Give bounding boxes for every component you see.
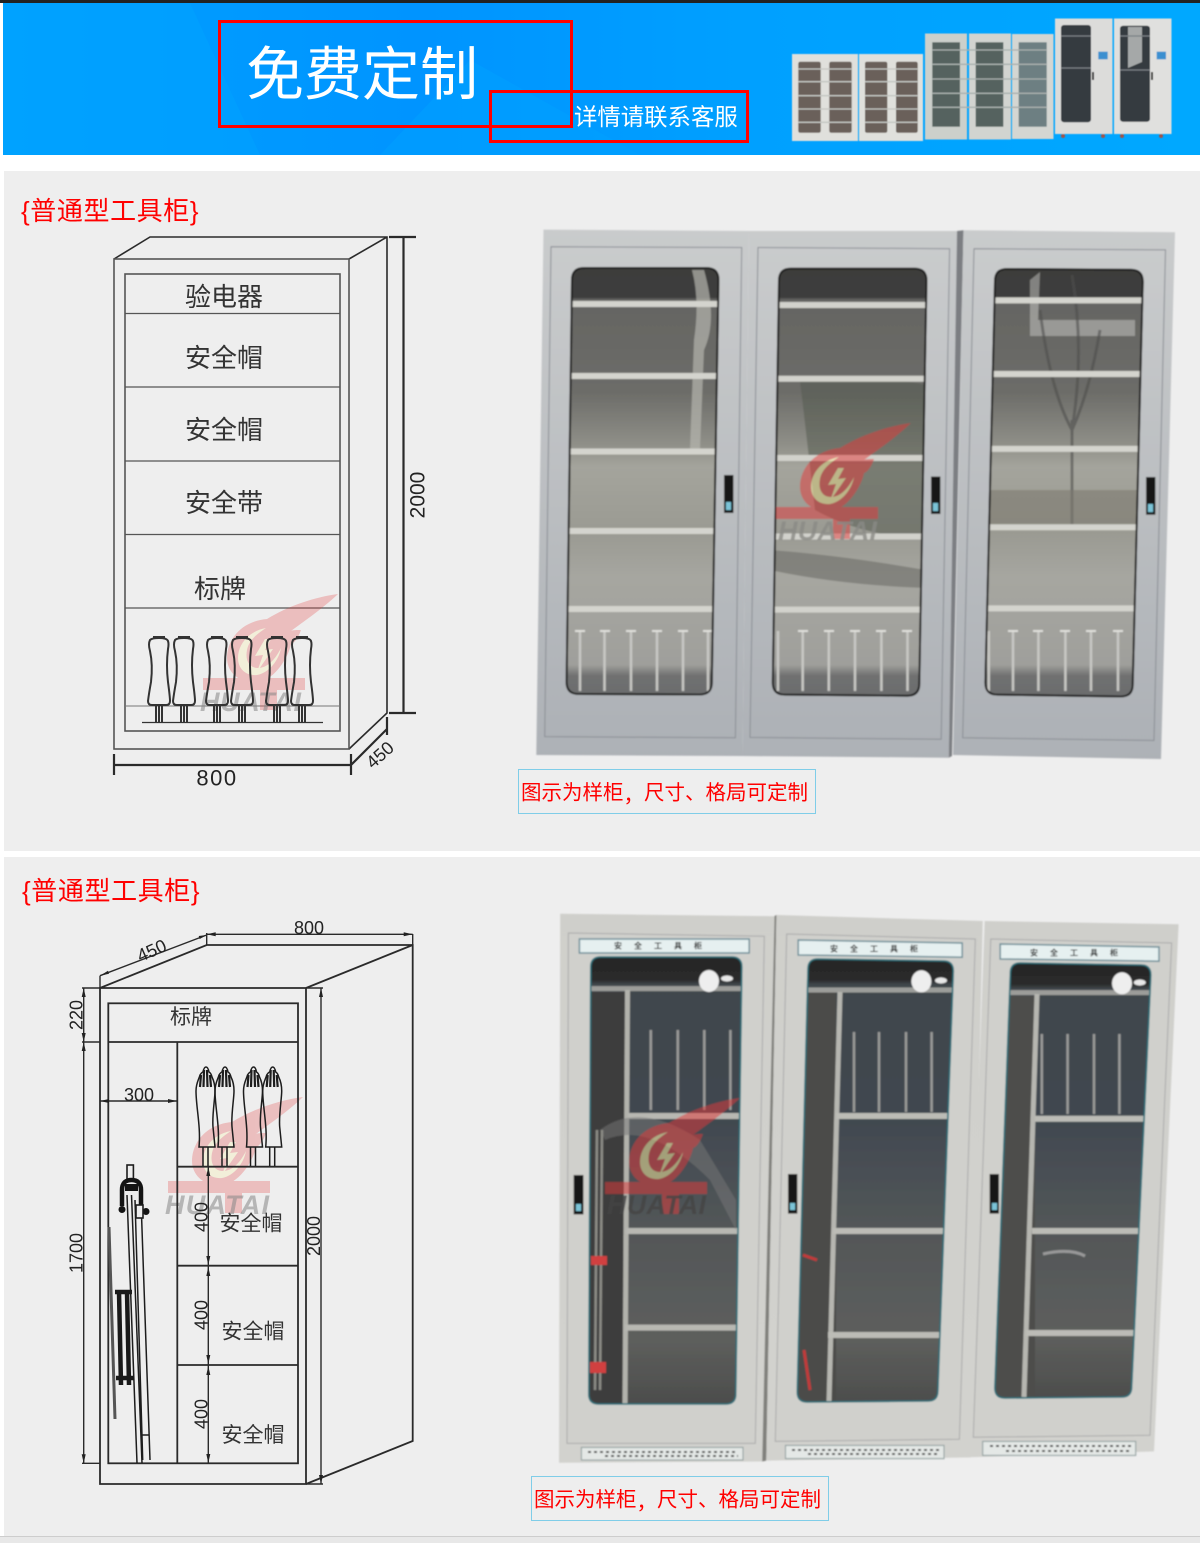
dimension lines	[82, 932, 413, 1484]
compartment labels: 标牌	[194, 574, 246, 604]
cabinet 2	[742, 231, 957, 758]
heading: {普通型工具柜}	[21, 196, 199, 226]
name plate	[1000, 944, 1159, 961]
compartment labels	[170, 1006, 284, 1447]
caption box: 图示为样柜，尺寸、格局可定制	[521, 778, 808, 808]
banner	[0, 0, 1200, 155]
watermark text: HUATAI	[200, 687, 302, 717]
dimension labels	[66, 918, 324, 1429]
cabinet 3	[949, 230, 1175, 759]
banner subtitle: 详情请联系客服	[574, 104, 738, 130]
compartment labels: 标牌	[170, 1006, 212, 1029]
dimension lines	[114, 237, 416, 775]
compartment labels: 安全帽	[222, 1424, 284, 1447]
watermark text: HUATAI	[778, 516, 878, 546]
dimension labels: 1700	[66, 1233, 86, 1273]
watermark text: HUATAI	[607, 1190, 707, 1220]
compartment labels: 安全带	[185, 488, 263, 518]
interior frame	[108, 1003, 298, 1463]
dimension labels: 400	[192, 1300, 212, 1330]
compartment labels: 安全帽	[220, 1212, 282, 1236]
dimension labels: 800	[294, 918, 324, 938]
cabinet 2	[762, 915, 983, 1462]
dimension labels: 300	[124, 1085, 154, 1105]
name plate	[579, 939, 749, 953]
compartment labels: 安全帽	[222, 1320, 284, 1344]
banner title: 免费定制	[246, 42, 478, 108]
insulated boots	[142, 638, 323, 722]
dimension labels	[196, 472, 430, 790]
insulating hook stick and grounding wire	[109, 1165, 150, 1463]
watermark logo	[605, 1098, 740, 1214]
cabinet 3	[966, 921, 1179, 1457]
dimension labels: 400	[192, 1202, 212, 1232]
red box: subtitle	[490, 92, 748, 142]
compartment labels: 安全帽	[185, 415, 263, 445]
panel: cabinet type 1	[4, 171, 1200, 851]
cabinet 1	[536, 230, 749, 756]
panel: cabinet type 2	[4, 857, 1200, 1536]
maker plate	[786, 1445, 944, 1459]
dimension labels: 220	[66, 1000, 86, 1030]
line drawing: tool cabinet perspective view	[66, 918, 413, 1484]
name plate: 安全工具柜	[614, 940, 714, 950]
compartment labels	[185, 282, 263, 604]
red box: title	[220, 22, 572, 126]
cabinet outline	[100, 945, 413, 1484]
name plate: 安全工具柜	[1030, 948, 1130, 958]
compartment labels: 验电器	[185, 282, 263, 312]
caption box	[532, 1476, 828, 1520]
thumbnail cabinets	[792, 18, 1172, 141]
dimension labels: 450	[134, 935, 169, 966]
caption box: 图示为样柜，尺寸、格局可定制	[534, 1485, 821, 1515]
watermark logo	[168, 1097, 303, 1213]
dimension labels: 2000	[406, 472, 430, 518]
maker plate	[983, 1441, 1136, 1455]
watermark logo	[203, 594, 338, 710]
photo: three grey cabinets	[536, 230, 1175, 759]
bottom edge strip	[0, 1536, 1200, 1543]
dimension labels: 400	[192, 1399, 212, 1429]
dimension labels: 2000	[304, 1216, 324, 1256]
maker plate	[581, 1447, 743, 1460]
name plate	[798, 940, 962, 957]
dimension labels: 450	[362, 738, 398, 772]
dimension labels: 800	[196, 766, 238, 790]
line drawing: storage cabinet front view	[114, 237, 430, 790]
heading: {普通型工具柜}	[22, 876, 200, 906]
compartment labels: 安全帽	[185, 343, 263, 373]
photo: three tool cabinets	[559, 914, 1179, 1463]
watermark logo	[776, 423, 911, 539]
watermark text: HUATAI	[165, 1190, 270, 1220]
caption box	[518, 770, 816, 814]
cabinet 1	[559, 914, 774, 1463]
rubber gloves	[196, 1067, 282, 1166]
name plate: 安全工具柜	[830, 944, 930, 954]
